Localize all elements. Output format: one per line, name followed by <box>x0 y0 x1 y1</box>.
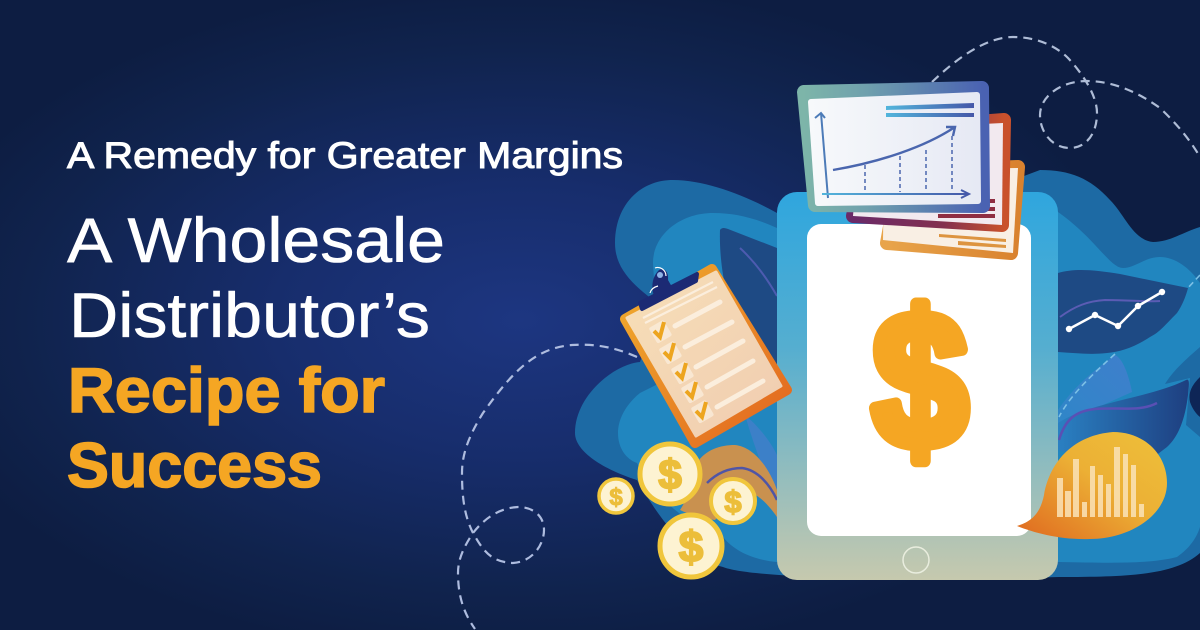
axes <box>815 113 828 198</box>
blob: right edge teal band <box>1165 347 1200 437</box>
tablet screen <box>807 224 1031 536</box>
bars <box>1057 447 1144 517</box>
heading: white lines: A Wholesale <box>67 206 445 276</box>
leaf: brown <box>680 445 777 520</box>
leaf: light blue right <box>1058 355 1132 425</box>
coin: top <box>640 444 700 504</box>
leaf: dark gradient right <box>1058 380 1189 470</box>
heading: orange lines <box>67 356 385 501</box>
leaf vein: brown <box>707 468 777 500</box>
card: red report <box>853 120 1004 225</box>
clipboard <box>625 267 787 443</box>
dashed line: right lower <box>1059 354 1115 417</box>
coin: bottom: $ <box>679 523 703 572</box>
clipboard rows <box>675 302 763 407</box>
tablet home button <box>903 547 929 573</box>
clipboard clip highlights <box>650 267 666 293</box>
coin: top: $ <box>658 451 682 498</box>
card face <box>811 95 978 203</box>
line chart: white <box>1066 289 1165 332</box>
dashed curve: top right loop <box>932 37 1200 157</box>
coin: small left <box>599 479 633 513</box>
coin: small left: $ <box>609 484 623 511</box>
coin: right <box>711 479 755 523</box>
leaf vein: right <box>1059 403 1157 440</box>
card: growth chart <box>804 88 983 206</box>
heading: white lines: Distributor’s <box>69 281 430 351</box>
heading: orange lines: Recipe for <box>68 356 385 426</box>
clipboard paper <box>627 272 781 436</box>
coin: right: $ <box>724 484 742 519</box>
blob: outer dark blue <box>575 170 1200 579</box>
tablet body <box>777 192 1058 580</box>
dashed curve: left loop <box>458 345 637 629</box>
tablet <box>777 192 1058 580</box>
clipboard board <box>625 269 787 443</box>
leaf: top right dark <box>1058 270 1188 354</box>
clipboard heading lines <box>643 282 717 323</box>
dashed drop lines <box>865 136 952 192</box>
blob: right edge navy inset <box>1189 377 1200 417</box>
check marks <box>654 322 706 417</box>
card: orange report <box>883 167 1018 253</box>
bubble <box>1017 432 1167 539</box>
leaf: behind clipboard <box>720 228 777 400</box>
leaf vein: behind clipboard <box>740 248 777 296</box>
speech bubble bar chart <box>1017 432 1167 539</box>
card frame <box>804 88 983 206</box>
leaf: lower left light blue <box>745 415 777 520</box>
legend bars <box>886 103 974 110</box>
subtitle: A Remedy for Greater Margins <box>67 135 623 176</box>
dollar sign: $ <box>872 272 968 488</box>
checkboxes <box>649 320 714 424</box>
leaf vein: top right <box>1060 300 1160 317</box>
dashed line: right upper <box>1186 275 1200 290</box>
heading: orange lines: Success <box>67 431 322 501</box>
coin: bottom <box>660 515 722 577</box>
heading: white lines <box>67 206 445 351</box>
blob: inner lighter blue <box>618 212 1200 563</box>
rising curve <box>833 127 955 170</box>
clipboard clip <box>640 274 697 309</box>
